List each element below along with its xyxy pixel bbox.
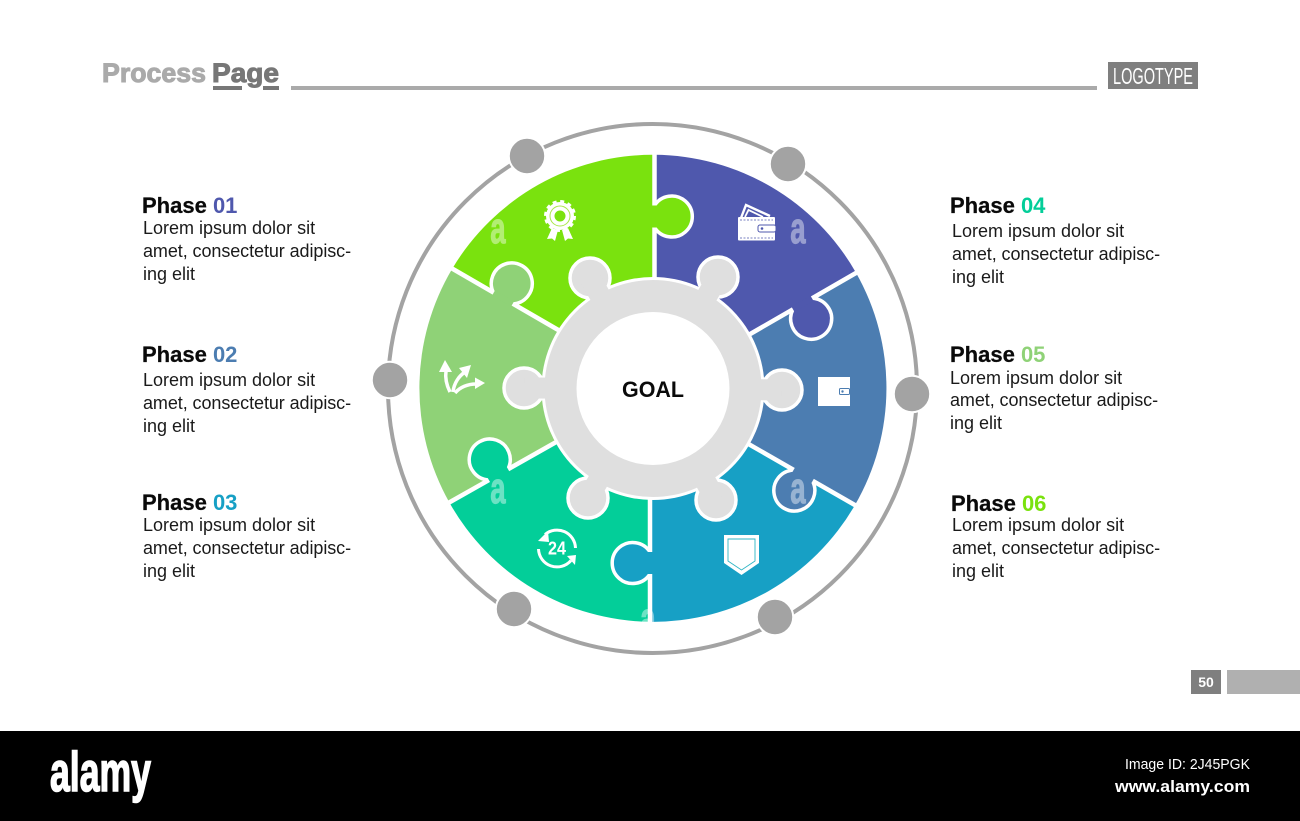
title underline: [213, 86, 279, 90]
body: amet, consectetur adipisc-: [143, 538, 351, 558]
body: amet, consectetur adipisc-: [143, 241, 351, 261]
icon: 24 hour cycle: [538, 530, 576, 567]
heading: Phase 02: [142, 342, 237, 367]
body: ing elit: [143, 416, 195, 436]
outer ring with nodes: [372, 124, 930, 653]
text block: phase 05: [950, 342, 1158, 433]
alamy logo: alamy: [50, 740, 151, 803]
header rule: [291, 86, 1097, 90]
stock watermark marks: a: [790, 203, 806, 253]
puzzle wheel: [419, 148, 886, 643]
text block: phase 06: [951, 491, 1160, 581]
body: Lorem ipsum dolor sit: [952, 221, 1124, 241]
piece: phase 2 light green: [419, 269, 653, 502]
title: Page: [212, 58, 279, 88]
knob: blue into teal blue: [774, 470, 815, 511]
footer band: alamy: [0, 731, 1300, 821]
page number: 50: [1198, 674, 1214, 690]
stock watermark marks: a: [490, 463, 506, 513]
knob: purple into blue: [791, 298, 832, 339]
body: amet, consectetur adipisc-: [143, 393, 351, 413]
title: Process: [102, 58, 206, 88]
text block: phase 03: [142, 490, 351, 581]
heading: Phase 01: [142, 193, 237, 218]
text block: phase 01: [142, 193, 351, 284]
knob: green into purple: [654, 196, 692, 237]
body: Lorem ipsum dolor sit: [143, 218, 315, 238]
body: amet, consectetur adipisc-: [950, 390, 1158, 410]
logotype: LOGOTYPE: [1113, 63, 1193, 89]
icon: rosette award: [546, 202, 574, 241]
body: amet, consectetur adipisc-: [952, 538, 1160, 558]
title: [102, 58, 279, 88]
piece: phase 5 blue: [653, 273, 886, 505]
body: Lorem ipsum dolor sit: [952, 515, 1124, 535]
goal label: GOAL: [622, 377, 684, 402]
piece: phase 1 green: [452, 155, 654, 388]
body: ing elit: [952, 267, 1004, 287]
text block: phase 04: [950, 193, 1160, 287]
icon: diverging arrows: [439, 360, 485, 393]
stock watermark marks: a: [490, 203, 506, 253]
logotype: [1108, 62, 1198, 89]
knob: light green into green: [491, 263, 532, 304]
icon: wallet square: [818, 377, 850, 406]
piece: phase 6 teal blue: [650, 388, 855, 622]
heading: Phase 06: [951, 491, 1046, 516]
body: Lorem ipsum dolor sit: [143, 370, 315, 390]
heading: Phase 04: [950, 193, 1046, 218]
body: Lorem ipsum dolor sit: [950, 368, 1122, 388]
stock watermark marks: [490, 203, 806, 643]
piece: phase 3 teal green: [449, 388, 653, 622]
header: process page title and logotype: [102, 58, 1198, 90]
knob: teal blue into teal green: [612, 542, 650, 583]
heading: Phase 03: [142, 490, 237, 515]
knob: teal green into light green: [469, 439, 510, 480]
icon: open wallet with cards: [738, 205, 776, 240]
body: Lorem ipsum dolor sit: [143, 515, 315, 535]
icon: shield: [724, 535, 759, 575]
text block: phase 02: [142, 342, 351, 436]
body: amet, consectetur adipisc-: [952, 244, 1160, 264]
icon: 24 hour cycle: 24: [548, 538, 566, 558]
piece: phase 4 purple: [653, 155, 856, 388]
body: ing elit: [143, 561, 195, 581]
body: ing elit: [950, 413, 1002, 433]
center goal gear: [504, 257, 802, 520]
image id: Image ID: 2J45PGK: [1125, 756, 1250, 773]
stock watermark marks: a: [640, 593, 656, 643]
website: www.alamy.com: [1114, 778, 1250, 796]
body: ing elit: [143, 264, 195, 284]
page number: [1191, 670, 1300, 694]
body: ing elit: [952, 561, 1004, 581]
stock watermark marks: a: [790, 463, 806, 513]
heading: Phase 05: [950, 342, 1045, 367]
